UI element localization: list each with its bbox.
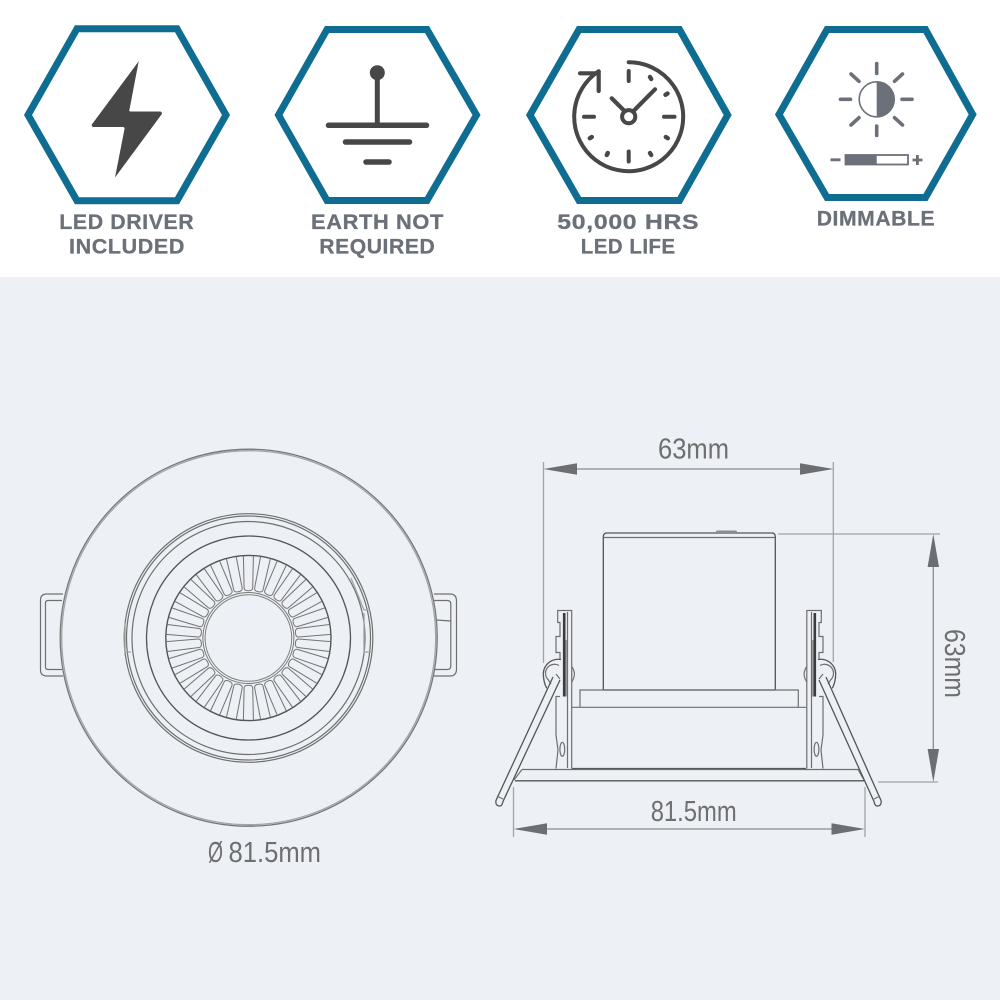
label: LED DRIVER INCLUDED: LED DRIVER bbox=[59, 210, 194, 234]
left mounting tab bbox=[40, 594, 63, 676]
background panel: technical drawings bbox=[0, 277, 1000, 1000]
label: LED DRIVER INCLUDED: INCLUDED bbox=[69, 234, 185, 258]
drawing: front view of downlight bbox=[40, 449, 456, 869]
inner rim rings bbox=[124, 514, 373, 762]
label: LED DRIVER INCLUDED bbox=[59, 210, 194, 258]
icon: half sun with brightness slider bbox=[830, 64, 922, 165]
icon: earth symbol bbox=[328, 65, 426, 162]
dimension: height 63mm bbox=[778, 534, 970, 782]
label: EARTH NOT REQUIRED: EARTH NOT bbox=[311, 210, 444, 234]
flange bbox=[514, 770, 864, 781]
hexagon frame: earth bbox=[278, 30, 476, 200]
label: 50,000 HRS LED LIFE: 50,000 HRS bbox=[557, 210, 699, 234]
dimension: height 63mm: 63mm bbox=[938, 629, 970, 698]
feature: earth not required bbox=[278, 30, 476, 258]
collar and lower body bbox=[572, 690, 806, 768]
left bracket and spring clip bbox=[496, 610, 574, 806]
hexagon frame: dimmable bbox=[779, 30, 973, 198]
dimension: top width 63mm: 63mm bbox=[658, 434, 729, 466]
drawing: side view of downlight bbox=[496, 434, 970, 837]
outer bezel bbox=[60, 449, 437, 826]
dimension: flange width 81.5mm: 81.5mm bbox=[651, 796, 737, 828]
diameter label: 81.5mm bbox=[228, 837, 321, 869]
label: 50,000 HRS LED LIFE bbox=[557, 210, 699, 258]
hexagon frame: life bbox=[530, 30, 728, 200]
dimension: top width 63mm bbox=[544, 434, 834, 663]
icon: lightning bolt bbox=[92, 61, 162, 177]
label: 50,000 HRS LED LIFE: LED LIFE bbox=[581, 234, 676, 258]
right bracket and spring clip bbox=[804, 610, 881, 806]
label: DIMMABLE: DIMMABLE bbox=[817, 206, 935, 230]
right mounting tab bbox=[434, 594, 456, 676]
driver housing bbox=[603, 530, 775, 690]
feature: 50,000 hours LED life bbox=[530, 30, 728, 258]
label: EARTH NOT REQUIRED: REQUIRED bbox=[319, 234, 435, 258]
label: EARTH NOT REQUIRED bbox=[311, 210, 444, 258]
hexagon frame: LED driver bbox=[28, 29, 226, 201]
heat sink fin ring bbox=[166, 555, 331, 721]
icon: clock with arrow bbox=[574, 62, 683, 171]
dimension: flange width 81.5mm bbox=[514, 787, 865, 837]
diameter label: Ø bbox=[208, 837, 223, 869]
feature: LED driver included bbox=[28, 29, 226, 258]
feature: dimmable bbox=[779, 30, 973, 230]
